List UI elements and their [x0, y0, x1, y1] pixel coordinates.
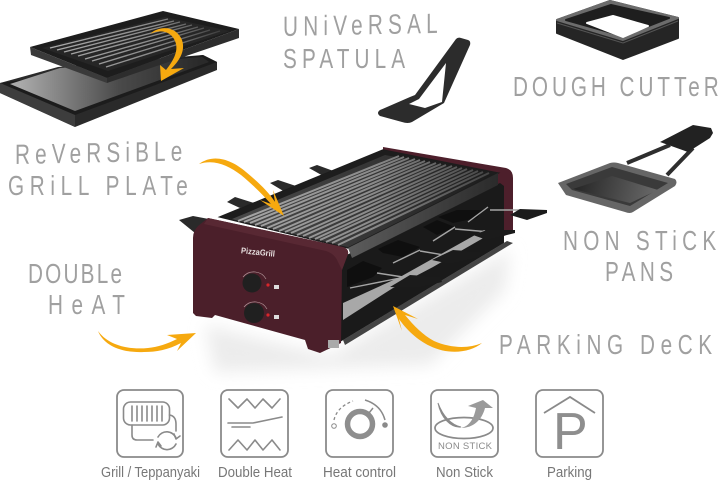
icon: double heat — [218, 390, 293, 481]
icon: grill / teppanyaki — [101, 390, 200, 481]
pan handle — [627, 125, 713, 175]
caption: Non Stick — [436, 464, 493, 481]
product: raclette pizza grill — [179, 147, 547, 353]
lower control knob — [244, 302, 279, 323]
pictogram text: NON STICK — [438, 441, 493, 452]
brand name: PizzaGrill — [241, 245, 275, 259]
grill plate — [220, 150, 498, 258]
arrow: to grill plate — [199, 159, 284, 216]
silver reflective strip — [343, 230, 492, 320]
icon: flip arrow — [150, 28, 184, 81]
maker badge — [328, 340, 339, 348]
caption: Parking — [547, 464, 592, 481]
label: universal spatula: UNiVeRSAL — [283, 9, 438, 43]
label: double heat: HeAT — [48, 290, 125, 321]
caption: Grill / Teppanyaki — [101, 464, 200, 481]
label: non stick pans: NON STiCK — [563, 226, 717, 257]
rear burgundy housing — [383, 147, 513, 240]
accessory: spatula — [378, 38, 470, 123]
dial pictogram — [332, 400, 388, 436]
arrow: to parking deck — [393, 306, 482, 352]
arrow: to double heat — [98, 331, 196, 352]
icon: non stick — [431, 390, 498, 481]
label: non stick pans — [563, 226, 717, 288]
front burgundy panel — [193, 218, 348, 353]
upper ribbed plate — [30, 11, 239, 83]
heat and pan pictogram — [228, 399, 282, 450]
floor shadow — [205, 250, 510, 372]
label: universal spatula — [283, 9, 438, 75]
label: universal spatula: SPATULA — [283, 44, 406, 75]
accessory: non stick pan — [558, 125, 713, 213]
grill plate pictogram — [124, 402, 180, 450]
parked pans and handles — [347, 207, 547, 288]
accessory: reversible grill plate pair — [0, 11, 239, 127]
roof — [544, 397, 595, 413]
accessory: dough cutter — [557, 1, 678, 59]
label: double heat — [28, 259, 125, 321]
label: non stick pans: PANS — [605, 257, 673, 288]
label: reversible grill plate: GRiLL PLATe — [8, 171, 188, 202]
icon: parking — [536, 390, 603, 481]
pan swoosh pictogram — [435, 400, 493, 438]
icon: heat control — [323, 390, 396, 481]
lower flat tray — [0, 55, 217, 127]
caption: Double Heat — [218, 464, 293, 481]
rear tabs — [179, 165, 339, 233]
parking deck edge — [343, 241, 513, 345]
parking interior — [340, 183, 504, 342]
label: reversible grill plate — [8, 137, 188, 202]
panel highlight — [204, 218, 348, 270]
upper control knob — [242, 272, 279, 292]
letter P: P — [553, 403, 588, 461]
caption: Heat control — [323, 464, 396, 481]
pan body — [558, 162, 676, 213]
label: dough cutter: DOUGH CUTTeR — [513, 72, 719, 103]
label: parking deck: PARKiNG DeCK — [499, 330, 713, 361]
label: double heat: DOUBLe — [28, 259, 122, 290]
label: reversible grill plate: ReVeRSiBLe — [15, 137, 182, 171]
